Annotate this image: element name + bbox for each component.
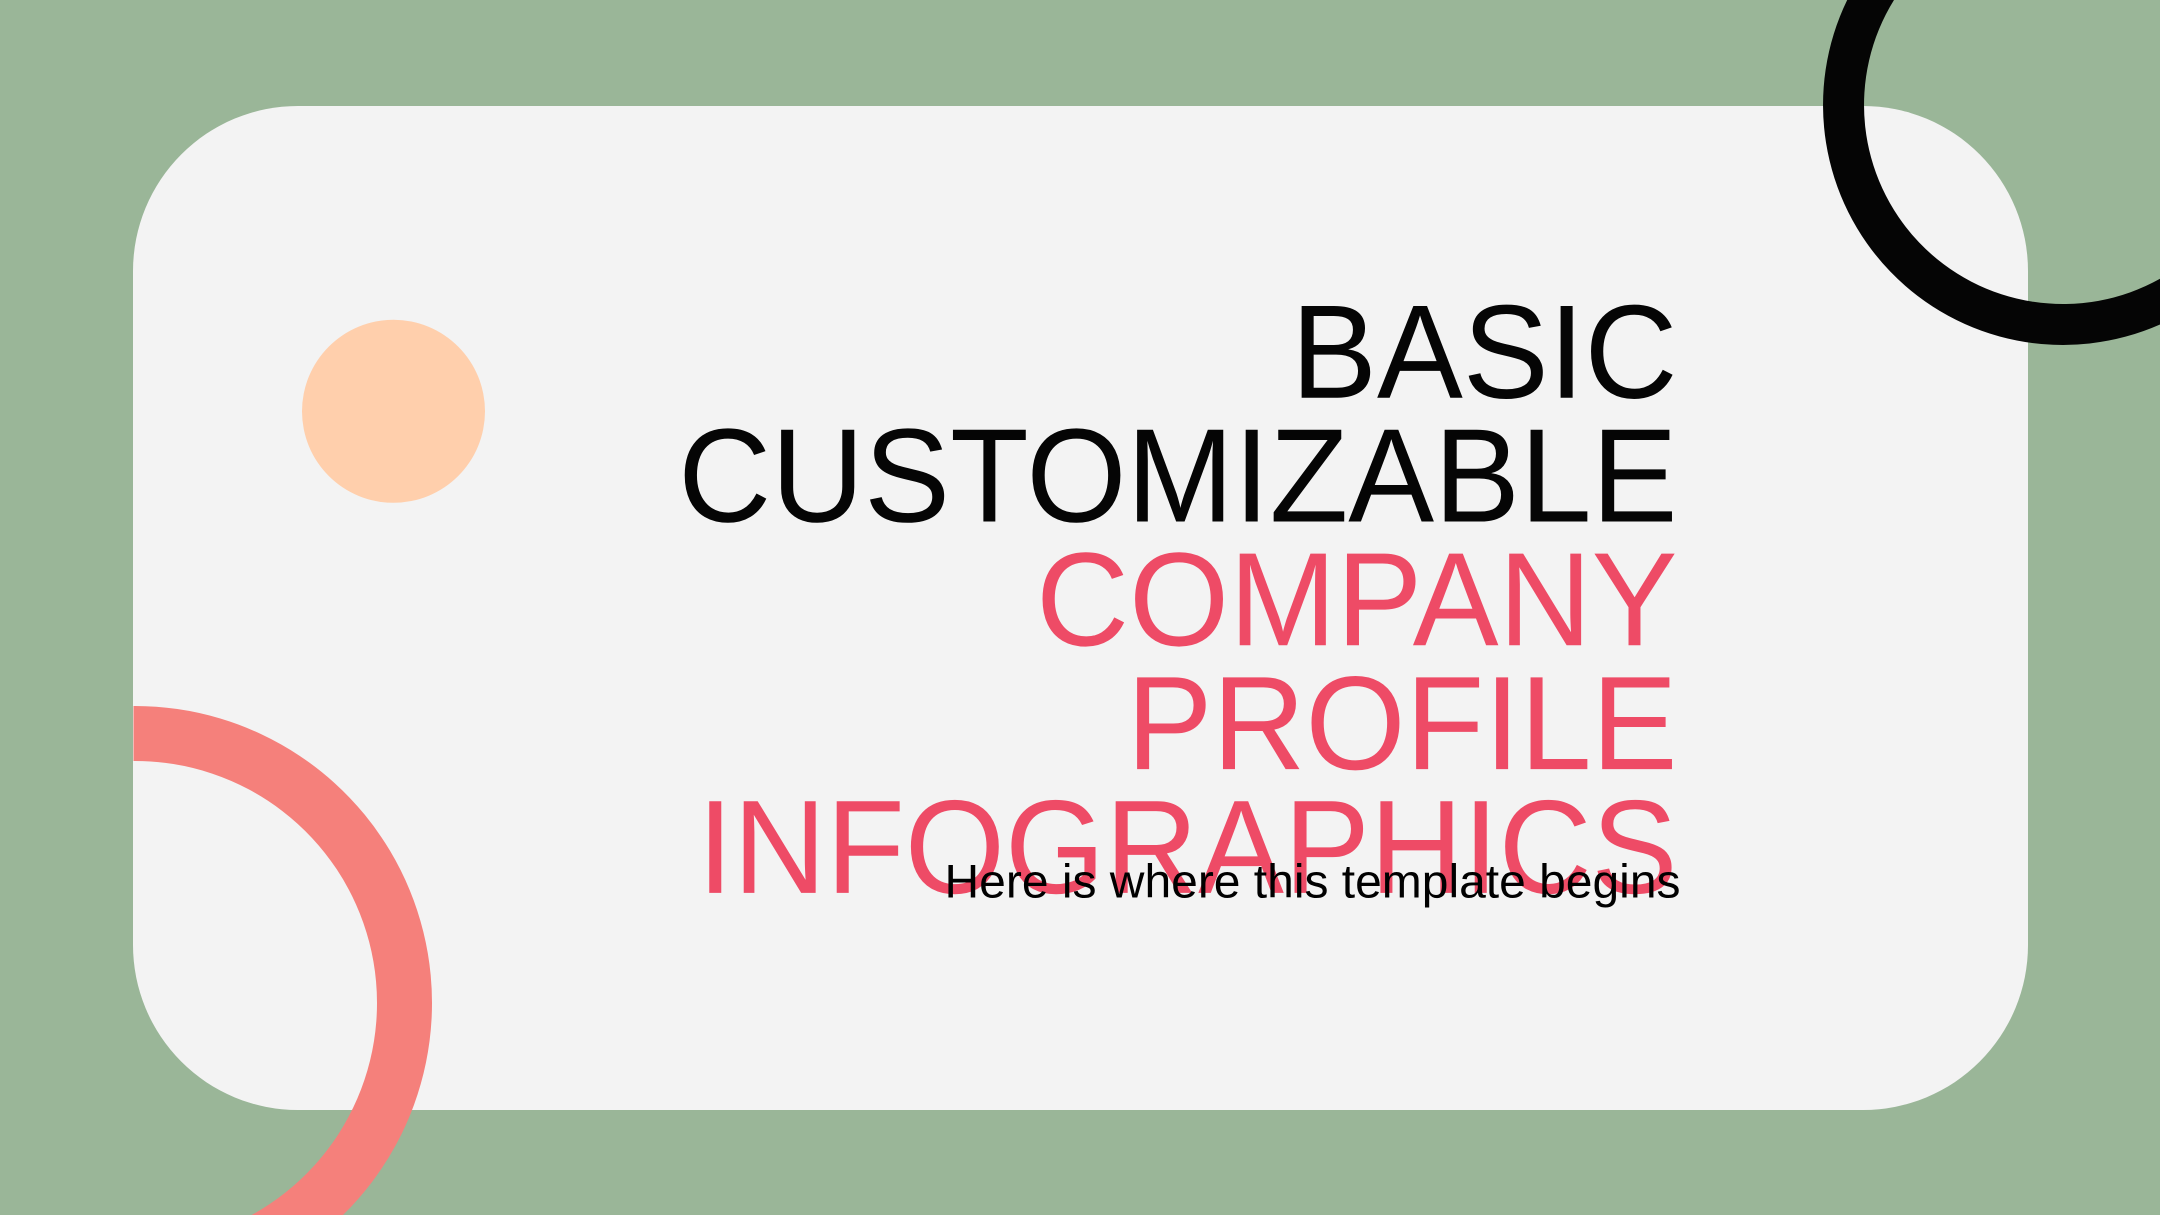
title line: BASIC: BASIC bbox=[1291, 277, 1678, 426]
panel: main card bbox=[133, 106, 2028, 1110]
decorative circle: peach bbox=[302, 320, 485, 503]
title line: COMPANY: COMPANY bbox=[1036, 524, 1678, 674]
decorative ring: black bbox=[1823, 0, 2160, 345]
decorative ring: coral bbox=[134, 706, 432, 1215]
title line: PROFILE: PROFILE bbox=[1127, 648, 1678, 798]
title line: CUSTOMIZABLE: CUSTOMIZABLE bbox=[678, 400, 1678, 550]
title bbox=[678, 277, 1678, 921]
title line: INFOGRAPHICS: INFOGRAPHICS bbox=[697, 772, 1678, 921]
subtitle: Here is where this template begins bbox=[945, 856, 1680, 908]
